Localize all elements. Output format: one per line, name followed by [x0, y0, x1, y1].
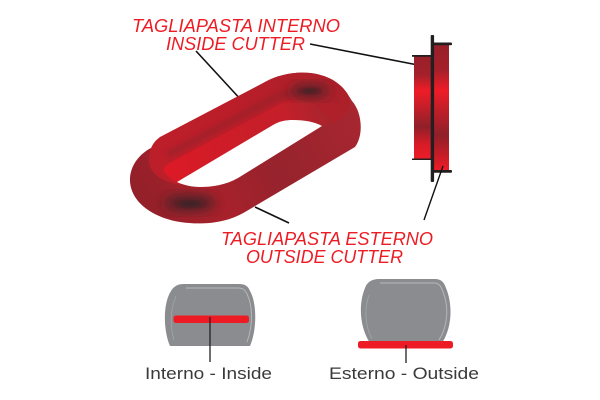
leader line: inside cutter to ring — [196, 51, 243, 102]
heading: outside cutter label — [221, 228, 433, 267]
heading: outside cutter label: OUTSIDE CUTTER — [246, 246, 403, 267]
title: inside cutter label: TAGLIAPASTA INTERNO — [132, 15, 340, 36]
title: inside cutter label: INSIDE CUTTER — [166, 33, 305, 54]
leader line: inside cutter to side view — [310, 44, 423, 66]
title: inside cutter label — [132, 15, 340, 54]
diagram: outside blade profile — [358, 279, 453, 363]
side view of cutter — [412, 35, 452, 182]
3D ring cutter illustration — [130, 73, 361, 223]
label: Esterno - Outside: Esterno - Outside — [329, 364, 479, 383]
leader line: outside cutter to side view — [424, 166, 443, 220]
leader line: outside cutter to ring — [255, 207, 289, 223]
heading: outside cutter label: TAGLIAPASTA ESTERNO — [221, 228, 433, 249]
label: Interno - Inside: Interno - Inside — [145, 364, 272, 383]
diagram: inside blade profile — [165, 284, 255, 362]
